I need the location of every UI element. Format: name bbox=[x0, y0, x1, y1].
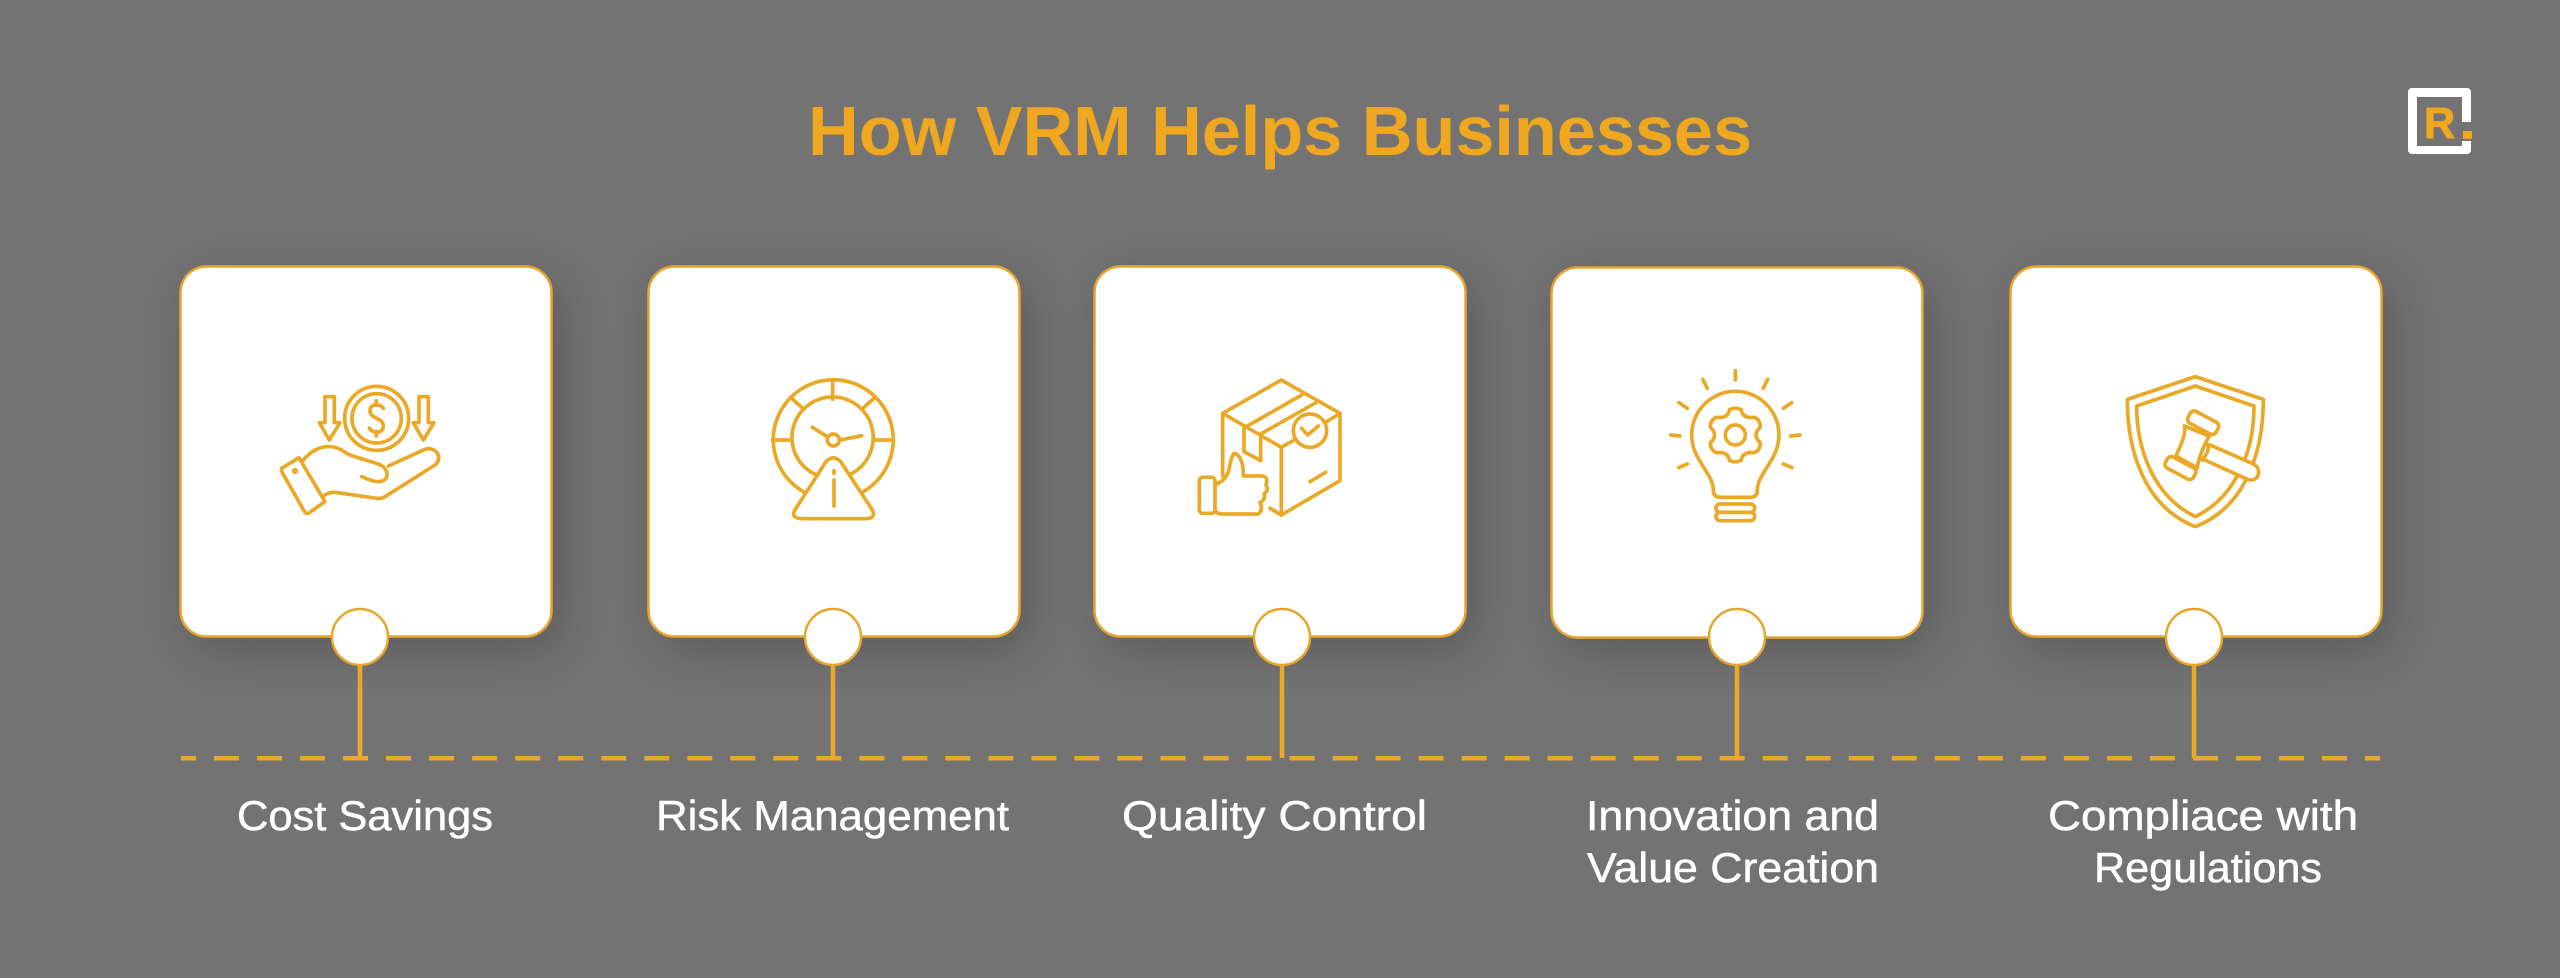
connector node bbox=[2166, 609, 2222, 665]
connector stem bbox=[1735, 665, 1739, 758]
dashed timeline bbox=[181, 756, 2380, 761]
connector stem bbox=[358, 665, 362, 758]
connector stem bbox=[831, 665, 835, 758]
label bbox=[2048, 792, 2358, 891]
icon: light bulb with gear bbox=[1671, 371, 1800, 521]
connector node bbox=[805, 609, 861, 665]
connector stem bbox=[1280, 665, 1284, 758]
label: Risk Management bbox=[656, 792, 1009, 839]
label: Innovation and bbox=[1586, 792, 1879, 839]
logo bbox=[2408, 88, 2472, 154]
title: How VRM Helps Businesses bbox=[808, 92, 1752, 170]
label: Cost Savings bbox=[237, 792, 493, 839]
icon: gauge with warning triangle bbox=[773, 380, 893, 519]
label bbox=[1586, 792, 1879, 891]
panel: cost savings bbox=[180, 266, 552, 839]
icon: hand with coin and down arrows bbox=[281, 386, 439, 513]
panel: quality control bbox=[1094, 266, 1466, 839]
connector node bbox=[1709, 609, 1765, 665]
connector node bbox=[332, 609, 388, 665]
connector node bbox=[1254, 609, 1310, 665]
label: Value Creation bbox=[1587, 844, 1879, 891]
panel: risk management bbox=[648, 266, 1020, 839]
connector stem bbox=[2192, 665, 2196, 758]
label: Quality Control bbox=[1122, 792, 1427, 839]
panel: innovation and value creation bbox=[1552, 268, 1922, 891]
label: Compliace with bbox=[2048, 792, 2358, 839]
logo: R bbox=[2424, 99, 2455, 148]
icon: shield with gavel bbox=[2127, 377, 2263, 527]
icon: box with thumbs up bbox=[1199, 380, 1340, 515]
label: Regulations bbox=[2094, 844, 2322, 891]
panel: compliance with regulations bbox=[2010, 266, 2382, 891]
